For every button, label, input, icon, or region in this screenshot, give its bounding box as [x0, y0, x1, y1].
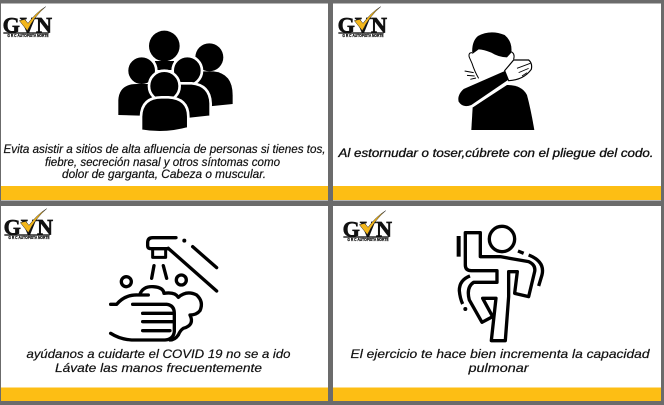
panel background	[333, 206, 661, 401]
text: hand washing advice: ayúdanos a cuidarte el COVID 19 no se a ido	[26, 347, 291, 361]
text: exercise advice	[350, 347, 650, 375]
logo: GVN	[4, 215, 54, 240]
panel background	[1, 4, 328, 200]
icon: person coughing into elbow	[458, 32, 534, 130]
logo: GVN	[3, 13, 53, 38]
yellow bar	[1, 388, 328, 401]
panel: cover cough	[333, 4, 661, 200]
panel background	[1, 206, 328, 401]
panel: avoid crowds	[1, 4, 328, 200]
text: crowds advice: fiebre, secreción nasal y otros síntomas como	[45, 155, 280, 169]
panel background	[333, 4, 661, 200]
logo: G R C AUTOPISTA NORTE	[8, 235, 50, 240]
yellow bar	[333, 186, 661, 200]
logo: GVN	[338, 13, 388, 38]
yellow bar	[1, 186, 328, 200]
text: hand washing advice	[26, 347, 291, 375]
yellow bar	[333, 388, 661, 401]
text: hand washing advice: Lávate las manos frecuentemente	[55, 361, 262, 375]
panel: hand washing	[1, 206, 328, 401]
text: exercise advice: El ejercicio te hace bien incrementa la capacidad	[350, 347, 650, 361]
text: cough advice: Al estornudar o toser,cúbrete con el pliegue del codo.	[337, 146, 654, 160]
icon: washing hands under faucet	[111, 238, 217, 340]
icon: group of people	[118, 31, 233, 132]
logo: G R C AUTOPISTA NORTE	[7, 33, 49, 38]
logo: G R C AUTOPISTA NORTE	[342, 33, 384, 38]
logo: GVN	[343, 217, 393, 242]
logo: G R C AUTOPISTA NORTE	[347, 237, 389, 242]
icon: person exercising	[459, 226, 543, 341]
text: exercise advice: pulmonar	[467, 361, 530, 375]
text: crowds advice: Evita asistir a sitios de alta afluencia de personas si tienes tos,	[4, 142, 326, 156]
text: crowds advice	[4, 142, 326, 181]
panel: exercise	[333, 206, 661, 401]
text: crowds advice: dolor de garganta, Cabeza o muscular.	[62, 167, 266, 181]
